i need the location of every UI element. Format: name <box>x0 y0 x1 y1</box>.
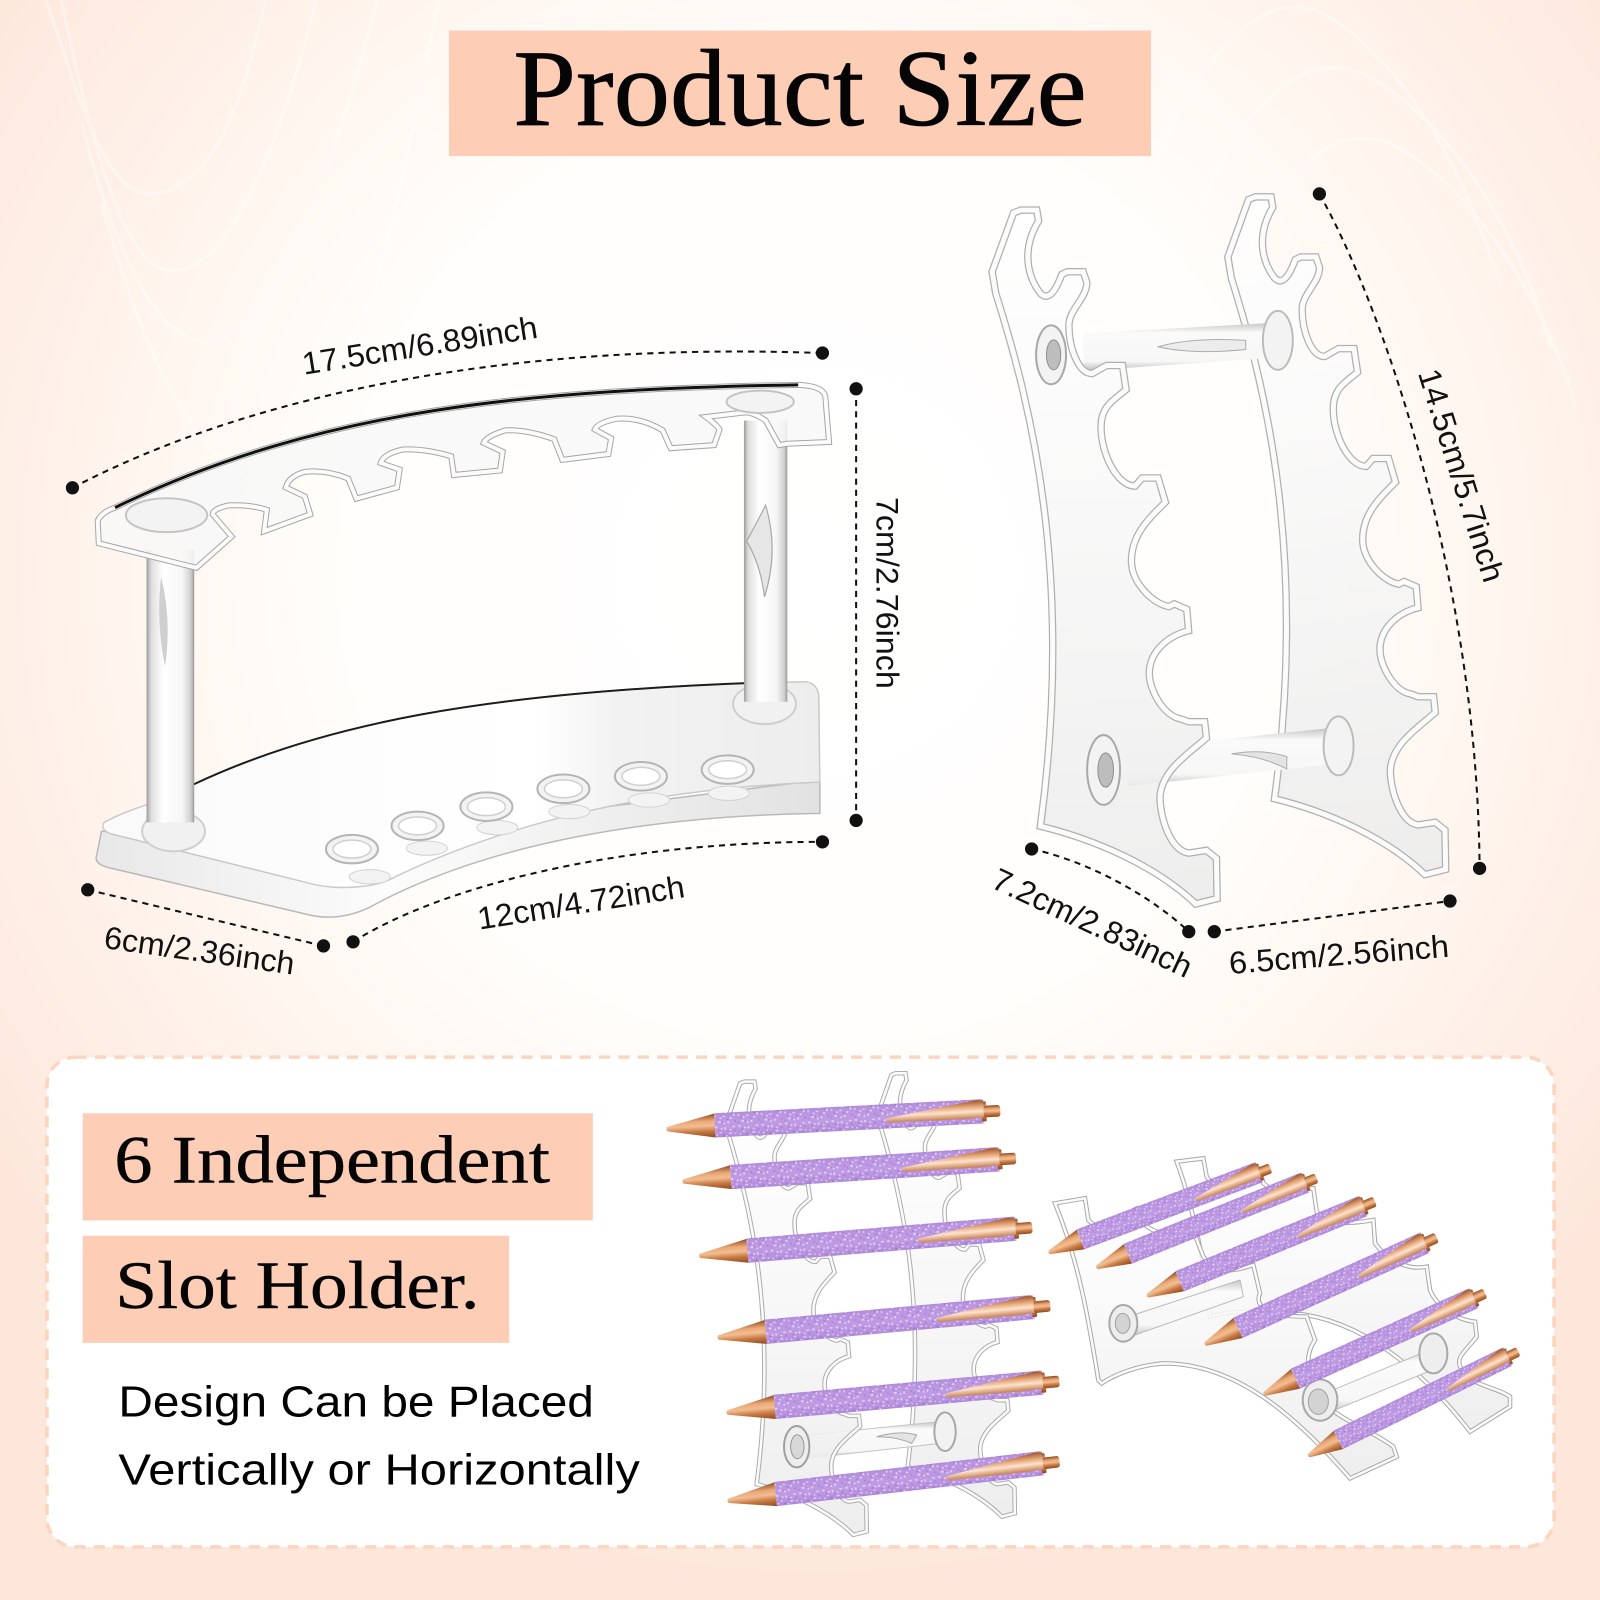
horizontal acrylic stand with dimensions <box>66 309 906 982</box>
dimension arc: 14.5cm <box>1313 187 1512 875</box>
body text <box>118 1377 640 1495</box>
acrylic plates <box>727 1073 1015 1535</box>
dimension arc: 12cm: 12cm/4.72inch <box>475 868 687 937</box>
decorative background lines <box>46 0 1577 480</box>
dimension arc: 17.5cm <box>66 309 829 494</box>
title: Product Size <box>513 28 1087 149</box>
title banner <box>449 28 1151 156</box>
acrylic stand, vertical view <box>992 197 1446 904</box>
pens <box>1044 1158 1523 1464</box>
heading line 1 <box>83 1113 593 1220</box>
dimension arc: 12cm <box>346 835 829 948</box>
stand with pens, vertical <box>666 1073 1061 1535</box>
dimension line: 7cm: 7cm/2.76inch <box>870 497 906 689</box>
dimension arc: 17.5cm: 17.5cm/6.89inch <box>299 309 540 382</box>
acrylic plates <box>1055 1158 1510 1478</box>
heading line 2 <box>83 1236 509 1343</box>
acrylic stand, horizontal view <box>96 385 829 917</box>
dimension line: 6.5cm: 6.5cm/2.56inch <box>1228 928 1450 981</box>
dimension arc: 14.5cm: 14.5cm/5.7inch <box>1411 364 1512 586</box>
body text: Vertically or Horizontally <box>118 1446 640 1495</box>
dimension line: 6.5cm <box>1208 894 1457 981</box>
panel: usage <box>47 1057 1554 1547</box>
dimension arc: 7.2cm: 7.2cm/2.83inch <box>987 861 1198 985</box>
heading line 2: Slot Holder. <box>115 1248 480 1323</box>
heading line 1: 6 Independent <box>114 1123 550 1198</box>
pens <box>666 1098 1061 1512</box>
dimension line: 6cm <box>81 883 330 982</box>
dimension line: 6cm: 6cm/2.36inch <box>102 919 297 982</box>
dimension line: 7cm <box>849 382 906 827</box>
vertical acrylic stand with dimensions <box>987 187 1512 985</box>
stand with pens, horizontal <box>1044 1158 1523 1478</box>
body text: Design Can be Placed <box>118 1377 594 1426</box>
